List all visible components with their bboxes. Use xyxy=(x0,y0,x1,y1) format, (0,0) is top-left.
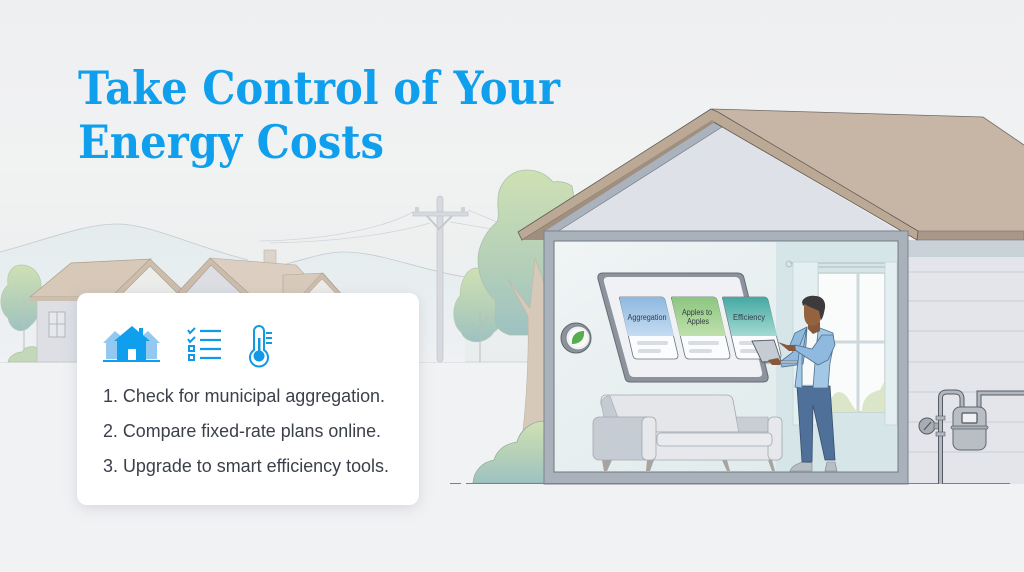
option card: Efficiency: Efficiency xyxy=(733,313,765,322)
option card: Aggregation: Aggregation xyxy=(628,313,666,322)
pointing hand xyxy=(778,342,796,351)
option card: Apples to Apples xyxy=(672,297,730,359)
gas pipe xyxy=(940,392,962,484)
person with tablet xyxy=(752,296,837,471)
option card: Apples to Apples: Apples xyxy=(687,317,709,326)
house: gable xyxy=(518,109,918,240)
tree: large behind house xyxy=(478,170,580,430)
sofa xyxy=(593,395,782,471)
tree: small right xyxy=(454,268,503,362)
supporting hand xyxy=(768,358,781,365)
icon: thermometer xyxy=(250,326,272,366)
jacket right panel xyxy=(813,328,834,388)
utility pole and wires xyxy=(260,196,497,362)
smart thermostat xyxy=(561,323,591,353)
jacket back arm xyxy=(780,327,807,367)
meter body xyxy=(953,407,986,450)
neighbour house 2 xyxy=(178,250,345,300)
front arm xyxy=(795,335,835,365)
gauge xyxy=(919,418,935,434)
shoes xyxy=(790,462,837,471)
step list xyxy=(103,386,389,476)
panel: three steps card xyxy=(77,293,419,505)
distant hills xyxy=(0,224,465,362)
neck xyxy=(808,322,820,334)
neighbour house 1 xyxy=(30,259,190,362)
shirt xyxy=(802,330,818,384)
option card: Aggregation xyxy=(620,297,678,359)
tablet xyxy=(752,340,798,363)
shrub beside house xyxy=(473,421,544,483)
icon: houses xyxy=(103,326,160,362)
window with curtains xyxy=(786,261,897,425)
house: siding wall xyxy=(908,240,1024,484)
neighbourhood bush xyxy=(8,347,58,362)
house floor line xyxy=(450,482,1010,484)
neighbourhood tree: left xyxy=(1,265,42,362)
icon: checklist xyxy=(188,328,221,360)
gas meter and pipes xyxy=(919,392,1024,484)
legs xyxy=(797,386,835,462)
head xyxy=(804,304,821,326)
house: interior room xyxy=(544,231,908,484)
title: Energy Costs xyxy=(78,115,384,169)
wall display screen xyxy=(598,273,781,382)
jacket left panel xyxy=(795,327,807,388)
step list: 3. Upgrade to smart efficiency tools. xyxy=(103,456,389,476)
option card: Efficiency xyxy=(722,297,781,359)
title: Take Control of Your xyxy=(78,61,561,115)
title xyxy=(78,61,561,169)
step list: 2. Compare fixed-rate plans online. xyxy=(103,421,381,441)
hair xyxy=(802,296,825,320)
house: roof xyxy=(712,109,1024,240)
step list: 1. Check for municipal aggregation. xyxy=(103,386,385,406)
option card: Apples to Apples: Apples to xyxy=(682,308,712,317)
